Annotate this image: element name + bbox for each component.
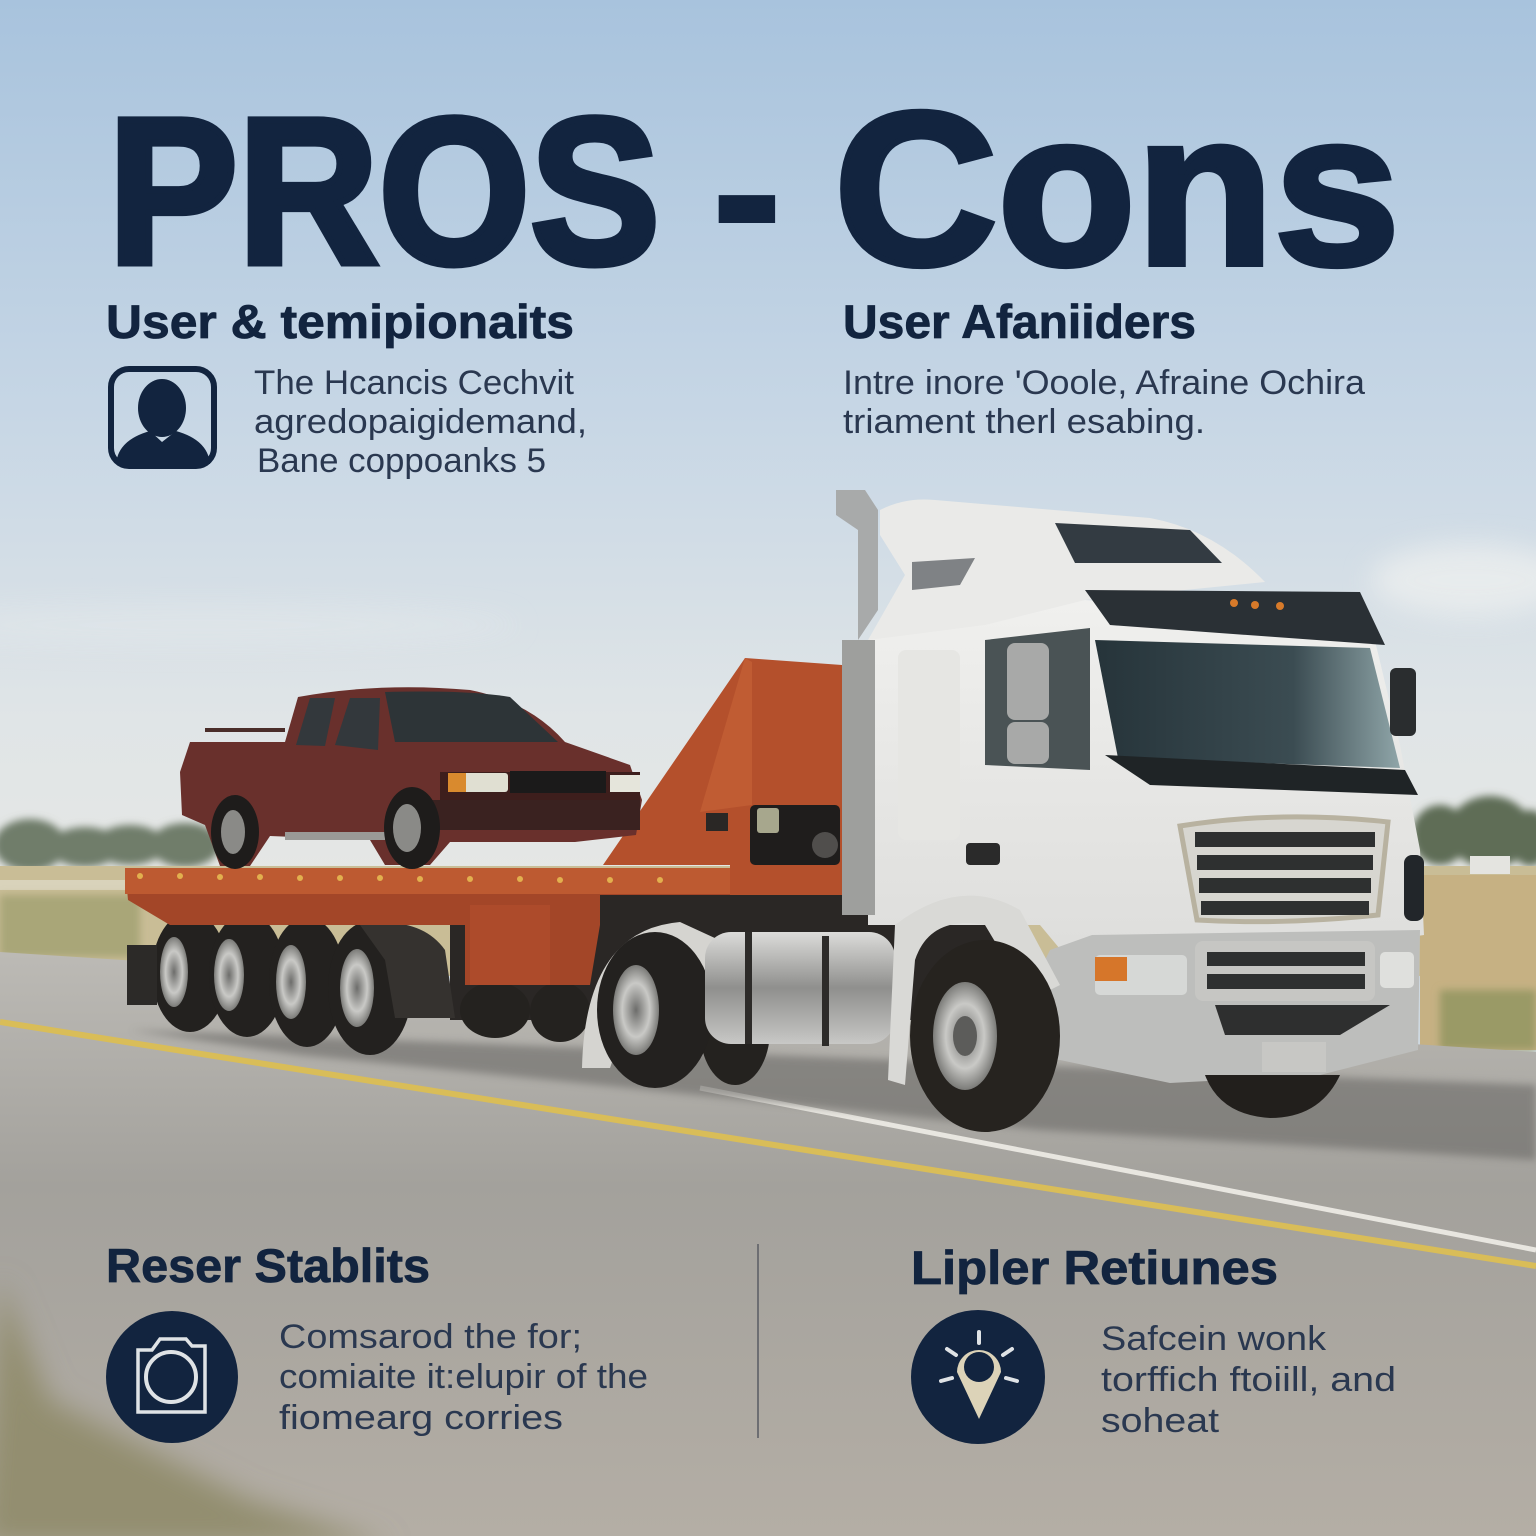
heading: User Afaniiders — [843, 295, 1196, 348]
text block: The Hcancis Cechvit — [254, 364, 575, 402]
background: field — [0, 856, 1536, 1050]
road: white line — [700, 1088, 1536, 1250]
background: sky — [0, 0, 1536, 900]
text block: torffich ftoiill, and — [1101, 1361, 1396, 1399]
road: yellow line — [0, 1022, 1536, 1266]
trailer: orange ramp housing — [603, 658, 842, 895]
text block: Bane coppoanks 5 — [257, 442, 546, 480]
text block: Safcein wonk — [1101, 1320, 1327, 1358]
text block — [1101, 1320, 1396, 1440]
tractor: grille — [1180, 817, 1388, 922]
text block — [843, 364, 1365, 441]
text block: Intre inore 'Ooole, Afraine Ochira — [843, 364, 1365, 402]
icon: user portrait — [111, 369, 214, 466]
text block: triament therl esabing. — [843, 403, 1205, 441]
text block — [254, 364, 587, 480]
pickup truck on trailer — [180, 687, 642, 869]
panel: bottom left — [106, 1239, 648, 1443]
trailer: deck — [125, 868, 850, 985]
panel: bottom right — [911, 1241, 1396, 1444]
title: PROS — [108, 76, 660, 308]
tractor: exhaust stack — [836, 490, 878, 915]
icon: camera — [106, 1311, 238, 1443]
text block: agredopaigidemand, — [254, 403, 587, 441]
text block: soheat — [1101, 1402, 1220, 1440]
text block: Comsarod the for; — [279, 1318, 582, 1356]
trailer: rear wheels — [127, 912, 590, 1055]
text block: fiomearg corries — [279, 1399, 563, 1437]
title: Cons — [834, 68, 1400, 311]
road: truck shadow — [130, 1030, 1536, 1160]
tractor: front wheels — [888, 896, 1340, 1132]
text block: comiaite it:elupir of the — [279, 1358, 648, 1396]
truck illustration — [125, 490, 1424, 1132]
tractor: bumper and lights — [1025, 930, 1420, 1083]
icon: location pin with light rays — [911, 1310, 1045, 1444]
heading: Lipler Retiunes — [911, 1241, 1278, 1294]
heading: User & temipionaits — [106, 295, 574, 348]
road: foreground grass — [0, 1280, 390, 1536]
text block — [279, 1318, 648, 1437]
tractor: drive wheels and tank — [582, 922, 895, 1088]
background: clouds — [0, 544, 1536, 645]
tractor: cab — [868, 499, 1424, 985]
background: road — [0, 952, 1536, 1536]
heading: Reser Stablits — [106, 1239, 430, 1292]
panel: top left — [106, 295, 587, 480]
background: tree line — [0, 796, 1536, 871]
title — [108, 68, 1400, 311]
panel: top right — [843, 295, 1365, 441]
title: - — [712, 76, 782, 308]
